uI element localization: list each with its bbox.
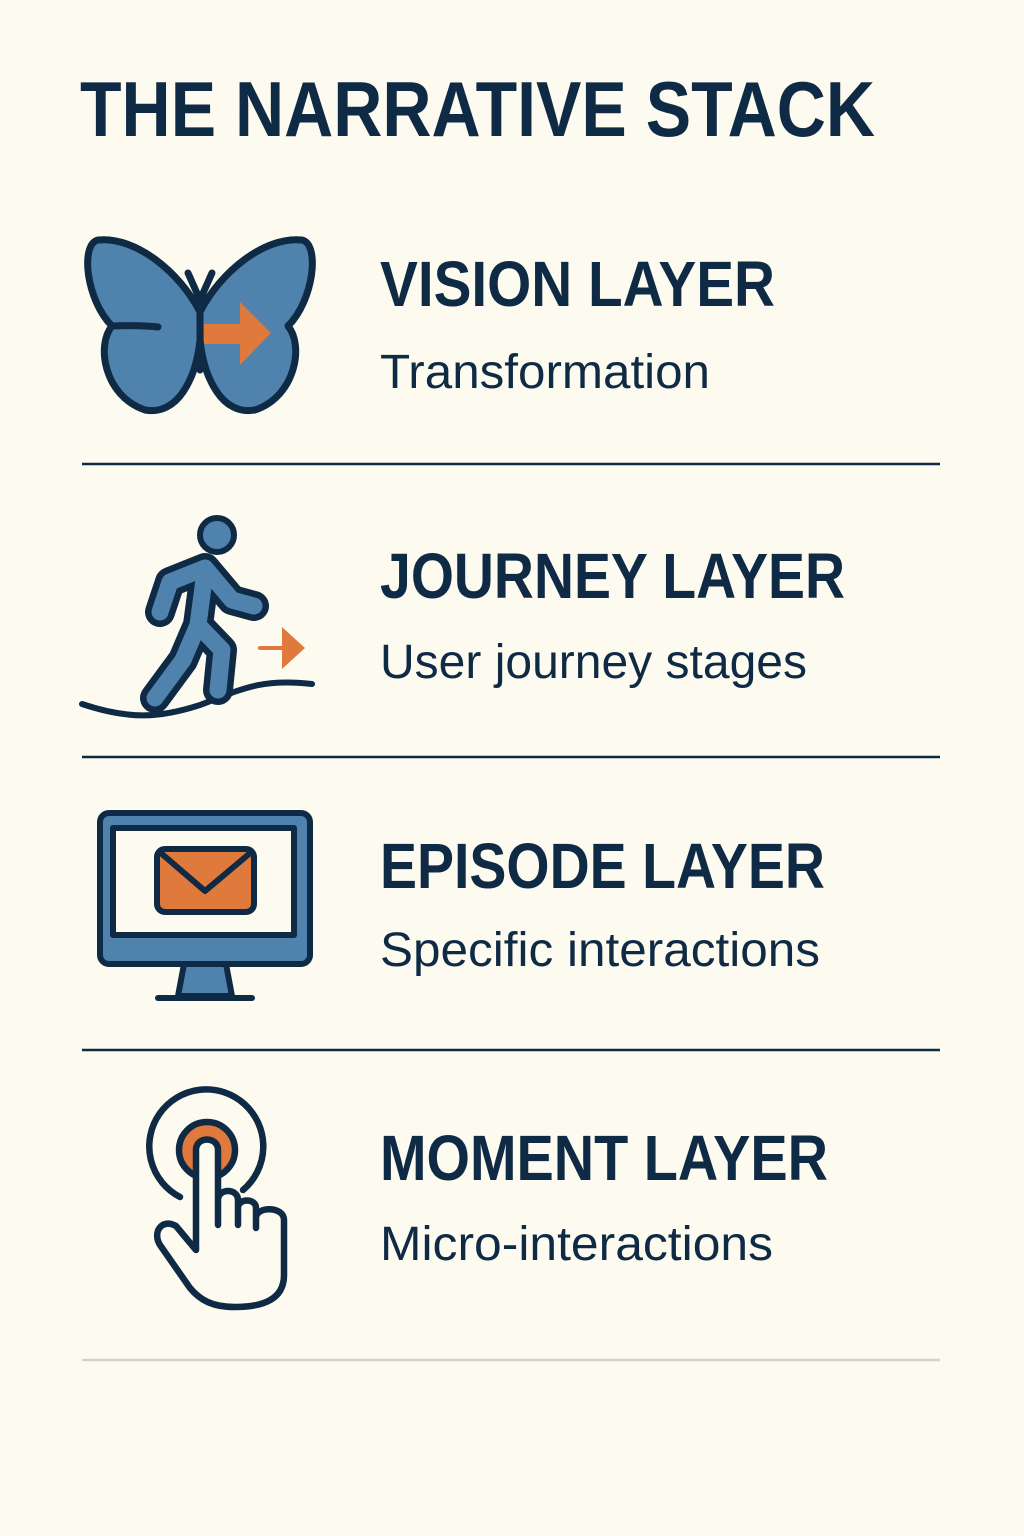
subtitle: user journey stages: User journey stages <box>380 636 807 689</box>
icon: monitor with envelope <box>100 813 310 998</box>
subtitle: transformation: Transformation <box>380 346 710 399</box>
icon: touch hand <box>149 1089 284 1307</box>
icon: walker <box>82 518 312 715</box>
heading: vision layer: VISION LAYER <box>380 248 775 320</box>
heading: moment layer: MOMENT LAYER <box>380 1122 828 1194</box>
heading: journey layer: JOURNEY LAYER <box>380 540 845 612</box>
heading: episode layer: EPISODE LAYER <box>380 830 825 902</box>
subtitle: micro-interactions: Micro-interactions <box>380 1218 773 1271</box>
icon: butterfly <box>88 240 312 411</box>
subtitle: specific interactions: Specific interactions <box>380 924 820 977</box>
title: THE NARRATIVE STACK <box>80 65 875 153</box>
